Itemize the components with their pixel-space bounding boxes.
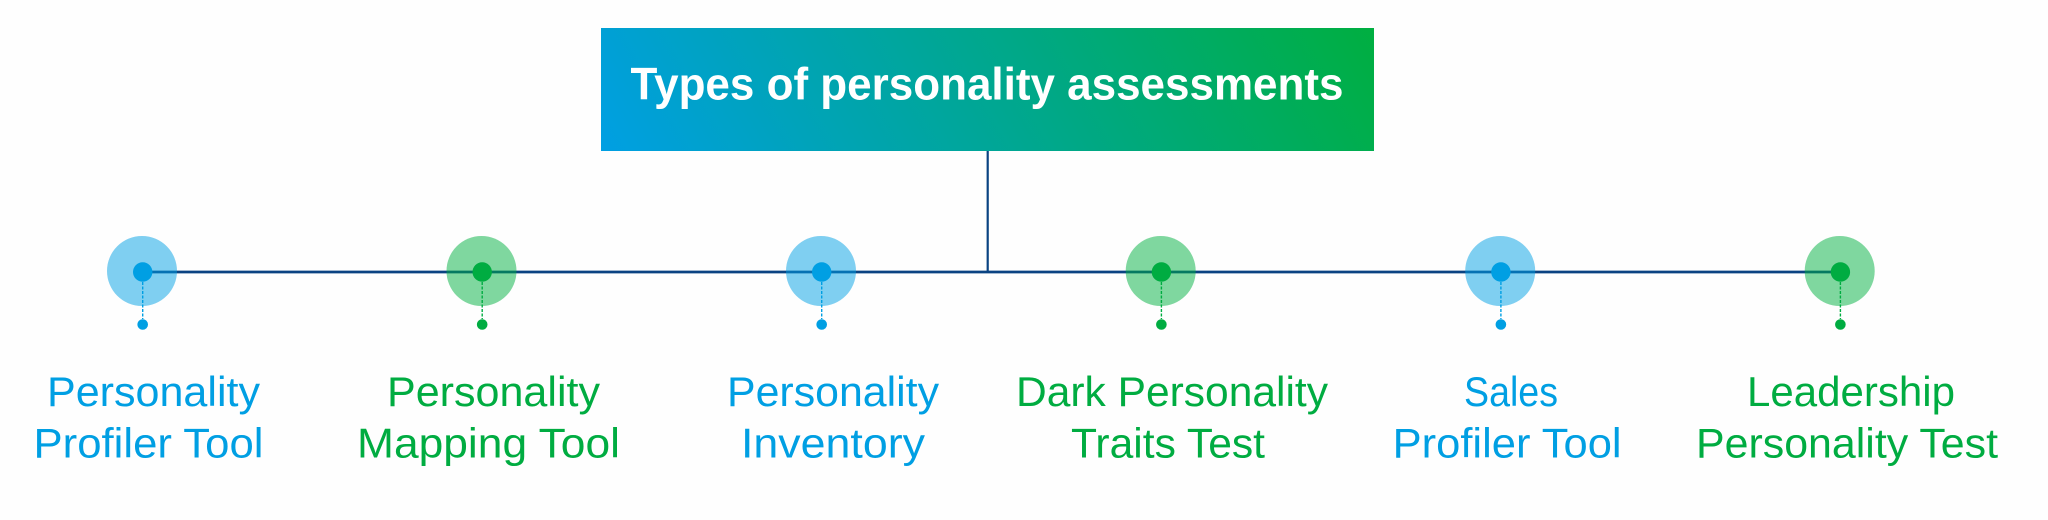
label: Leadership (1747, 368, 1955, 415)
label: Personality (47, 368, 260, 415)
label: Personality (727, 368, 939, 415)
connector: vertical stem from title box to timeline (987, 151, 989, 272)
label: Profiler Tool (1393, 419, 1622, 466)
label: Inventory (741, 419, 925, 466)
icon: node marker (1805, 236, 1875, 330)
connector: horizontal timeline (143, 271, 1841, 273)
title: Types of personality assessments (630, 58, 1344, 110)
item 2: Personality Mapping Tool (357, 236, 620, 466)
item 5: Sales Profiler Tool (1393, 236, 1622, 466)
icon: node marker (1126, 236, 1196, 330)
item 6: Leadership Personality Test (1696, 236, 1998, 466)
icon: node marker (446, 236, 516, 330)
label (1016, 368, 1328, 466)
label: Profiler Tool (34, 419, 264, 466)
label: Mapping Tool (357, 419, 620, 466)
label (727, 368, 939, 466)
label (357, 368, 620, 466)
label: Dark Personality (1016, 368, 1328, 415)
icon: node marker (107, 236, 177, 330)
label: Personality (387, 368, 600, 415)
title box with gradient (601, 28, 1374, 151)
label (34, 368, 264, 466)
label (1696, 368, 1998, 466)
label: Personality Test (1696, 419, 1998, 466)
label: Traits Test (1071, 419, 1265, 466)
item 4: Dark Personality Traits Test (1016, 236, 1328, 466)
icon: node marker (786, 236, 856, 330)
label: Sales (1464, 368, 1558, 415)
item 1: Personality Profiler Tool (34, 236, 264, 466)
title panel (601, 28, 1374, 151)
icon: node marker (1465, 236, 1535, 330)
label (1393, 368, 1622, 466)
item 3: Personality Inventory (727, 236, 939, 466)
